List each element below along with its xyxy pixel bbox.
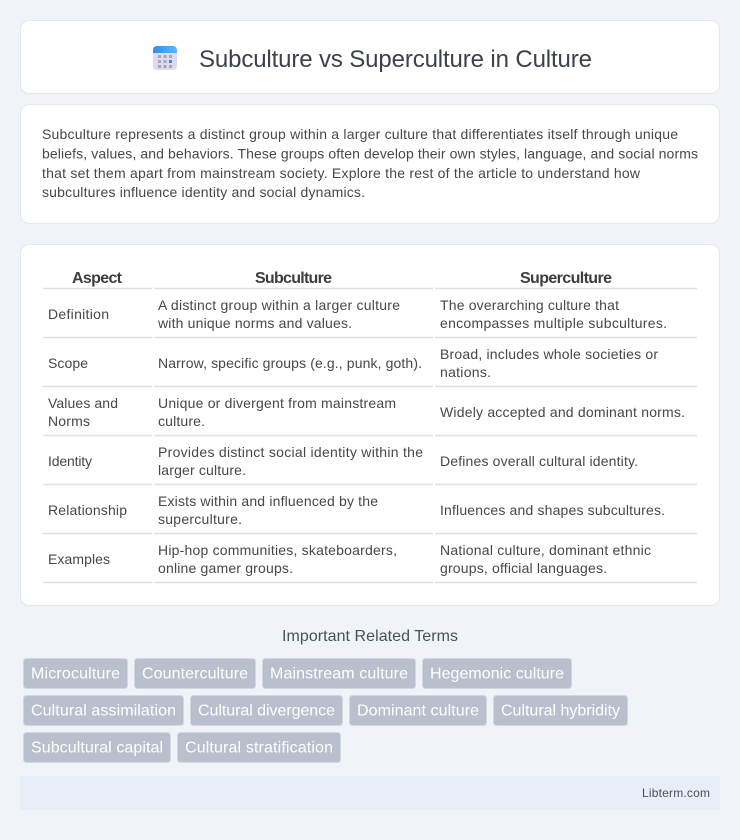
tag: subcultural capital <box>24 732 170 762</box>
panel: description: that set them apart from mainstream society. Explore the rest of the article to understand how <box>42 165 641 181</box>
footer bar <box>20 776 720 810</box>
panel: comparison table <box>20 244 720 606</box>
tag: cultural assimilation: Cultural assimilation <box>31 702 176 720</box>
row: definition <box>48 297 667 331</box>
tag: hegemonic culture: Hegemonic culture <box>430 666 564 682</box>
tag: microculture: Microculture <box>31 666 120 682</box>
row: examples: Examples <box>48 551 110 567</box>
row: identity <box>48 444 638 478</box>
row: scope <box>48 346 658 380</box>
row: values and norms: Values and <box>48 395 118 411</box>
footer bar: Libterm.com <box>642 786 710 800</box>
row: relationship: superculture. <box>158 511 242 527</box>
tag: counterculture <box>134 658 256 688</box>
row: examples: Hip-hop communities, skateboarders, <box>158 542 397 558</box>
row: definition: A distinct group within a larger culture <box>158 297 400 313</box>
row: definition: encompasses multiple subcultures. <box>440 315 667 331</box>
tag: hegemonic culture <box>422 658 572 688</box>
row: scope: Narrow, specific groups (e.g., punk, goth). <box>158 355 422 371</box>
tag: cultural hybridity <box>494 696 628 726</box>
table header: Superculture <box>520 270 612 287</box>
row: definition: with unique norms and values. <box>157 315 352 331</box>
tag: cultural stratification: Cultural stratification <box>185 740 333 756</box>
tag: subcultural capital: Subcultural capital <box>31 740 163 756</box>
tag: cultural divergence <box>190 696 342 726</box>
tag: dominant culture: Dominant culture <box>357 702 479 720</box>
row: relationship: Influences and shapes subcultures. <box>440 502 665 518</box>
tag: cultural stratification <box>178 732 340 762</box>
panel: description <box>20 104 720 224</box>
tag: cultural hybridity: Cultural hybridity <box>501 702 620 720</box>
panel: description: subcultures influence identity and social dynamics. <box>42 184 365 200</box>
table header: Subculture <box>255 270 332 287</box>
row: scope: nations. <box>440 364 491 380</box>
table header <box>72 270 612 287</box>
row: values and norms: Unique or divergent from mainstream <box>158 395 396 411</box>
tag: mainstream culture: Mainstream culture <box>270 666 408 682</box>
row: relationship: Relationship <box>48 502 127 518</box>
row: scope: Broad, includes whole societies or <box>440 346 658 362</box>
row: identity: Identity <box>48 453 92 469</box>
row: values and norms: Norms <box>48 413 90 429</box>
row: examples: online gamer groups. <box>158 560 293 576</box>
tag cloud <box>24 658 628 762</box>
row: examples <box>48 542 651 576</box>
row: identity: larger culture. <box>158 462 246 478</box>
tag: cultural assimilation <box>24 696 184 726</box>
panel: description: beliefs, values, and behaviors. These groups often develop their own styles, language, and social norms <box>42 146 698 162</box>
row: relationship <box>48 493 665 527</box>
row: definition: The overarching culture that <box>440 297 619 313</box>
tag: counterculture: Counterculture <box>142 666 248 682</box>
row: scope: Scope <box>48 355 88 371</box>
row: examples: National culture, dominant ethnic <box>440 542 651 558</box>
row: values and norms: culture. <box>158 413 205 429</box>
row: relationship: Exists within and influenced by the <box>158 493 378 509</box>
row: values and norms: Widely accepted and dominant norms. <box>440 404 685 420</box>
tag: cultural divergence: Cultural divergence <box>198 702 335 720</box>
table header: Aspect <box>72 270 123 287</box>
row: values and norms <box>48 395 685 429</box>
tag: mainstream culture <box>262 658 416 688</box>
panel: description: Subculture represents a distinct group within a larger culture that differentiates itself through unique <box>42 126 678 142</box>
row: definition: Definition <box>48 306 109 322</box>
icon: calendar grid <box>153 46 177 70</box>
title: Subculture vs Superculture in Culture <box>199 46 592 73</box>
tag: microculture <box>24 658 128 688</box>
row: examples: groups, official languages. <box>440 560 607 576</box>
row: identity: Provides distinct social identity within the <box>158 444 423 460</box>
heading: important related terms: Important Related Terms <box>282 628 458 645</box>
header panel <box>20 20 720 94</box>
row: identity: Defines overall cultural identity. <box>440 453 638 469</box>
tag: dominant culture <box>350 696 486 726</box>
